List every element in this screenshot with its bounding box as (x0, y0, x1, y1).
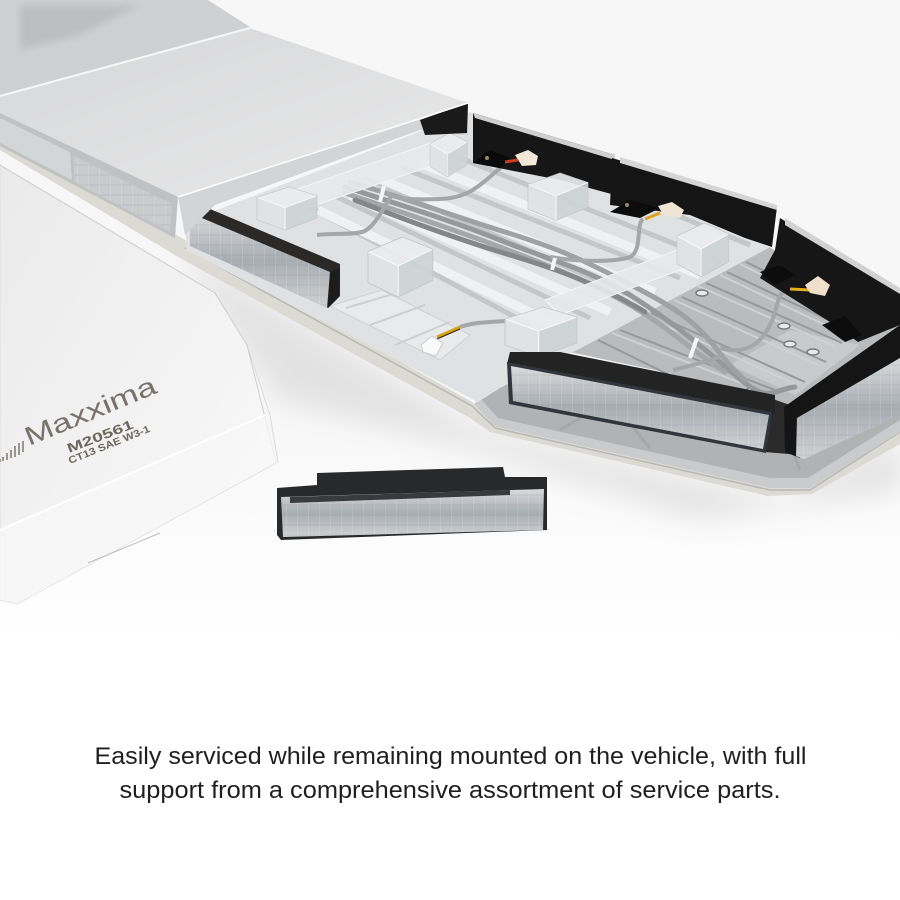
cast shadow under light bar (180, 250, 900, 520)
side connector (790, 276, 830, 296)
rear connector one (505, 150, 538, 166)
cable to side connector (720, 289, 790, 350)
left front module (190, 206, 340, 308)
clear lens blocks and bars (257, 133, 729, 357)
clear bar front (545, 245, 712, 315)
closed lid clear side (178, 103, 468, 235)
clear inner plate (186, 112, 770, 402)
loose cable with white connector (421, 321, 505, 356)
lens model number: M20561 (65, 417, 135, 456)
cable to left module (317, 195, 392, 235)
clear block middle (368, 237, 433, 297)
clear block rear left (257, 187, 317, 230)
clear block rear middle (528, 173, 588, 220)
lens brand name: Maxxima (20, 370, 161, 452)
cable ties (380, 186, 697, 358)
caption (94, 743, 806, 804)
right front module (784, 325, 900, 459)
detached LED module (277, 467, 547, 540)
cable bundle (345, 182, 795, 393)
loose cable to tray (673, 356, 722, 370)
closed lid front lens (0, 113, 178, 238)
light bar assembly (0, 0, 900, 496)
tray screw holes (696, 290, 819, 394)
clear bar rear (280, 138, 455, 212)
clear block front left (505, 307, 577, 357)
closed lid top (0, 28, 468, 197)
lens certification text: CT13 SAE W3-1 (67, 424, 152, 467)
removed clear lens cover (0, 165, 278, 604)
centre front module (507, 352, 775, 453)
caption line one: Easily serviced while remaining mounted on the vehicle, with full (94, 743, 806, 770)
clear block front right (677, 223, 729, 277)
rear black module left (473, 113, 615, 195)
lens signal bars logo (0, 441, 23, 462)
cable to rear connector two (550, 219, 643, 261)
grey tray with ribs (560, 247, 900, 455)
outer base shell (0, 128, 900, 496)
clear block rear right (430, 133, 467, 177)
far lid panel (0, 0, 250, 95)
caption line two: support from a comprehensive assortment of service parts. (120, 777, 780, 804)
side black module (760, 218, 900, 342)
cable to rear connector one (380, 162, 507, 199)
rear connector two (645, 202, 684, 219)
rear black module right (610, 157, 777, 247)
